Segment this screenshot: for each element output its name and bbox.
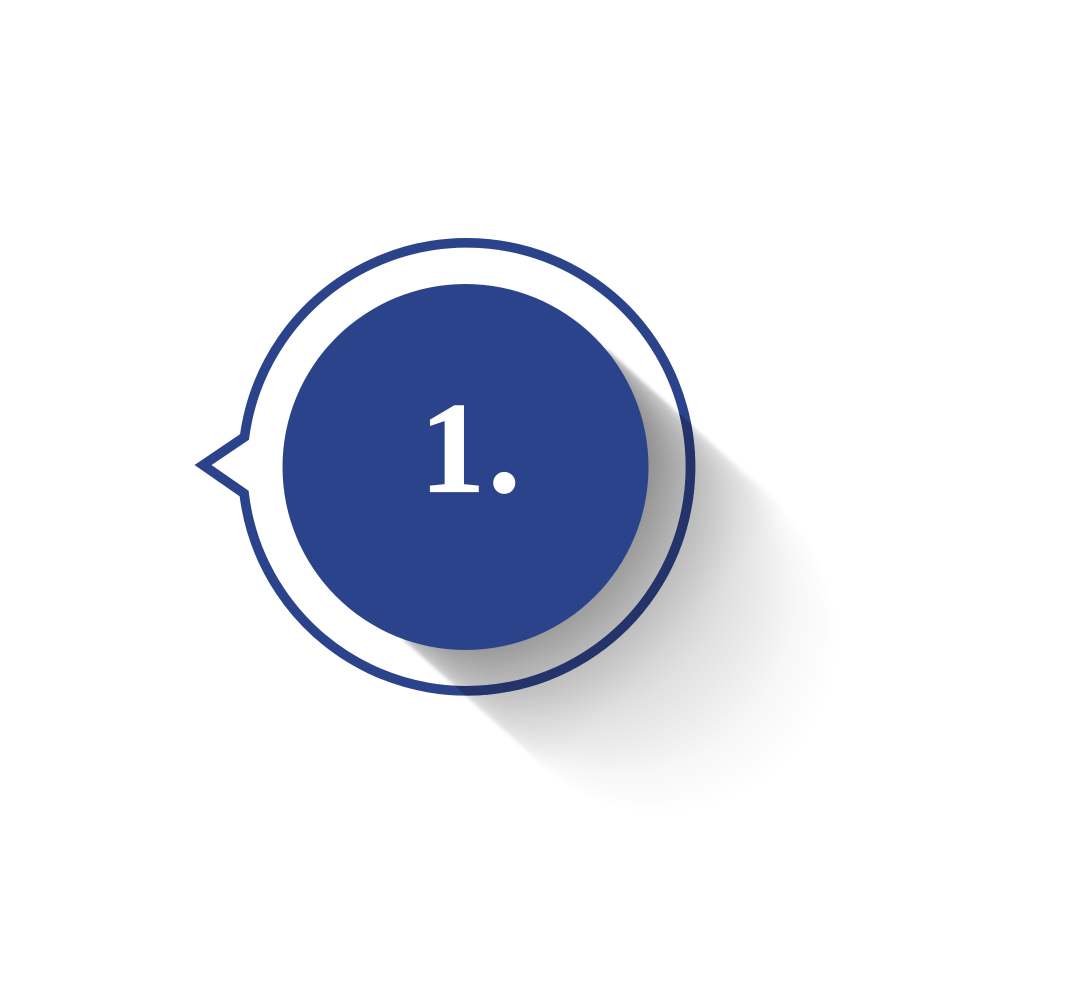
long fading drop shadow <box>270 270 890 870</box>
shaded section of ring inside the shadow <box>454 414 696 696</box>
solid blue inner circle <box>282 284 648 650</box>
badge: numbered speech bubble <box>194 238 794 773</box>
step number: 1. <box>420 377 524 521</box>
speech bubble ring with left-pointing notch <box>203 243 691 691</box>
